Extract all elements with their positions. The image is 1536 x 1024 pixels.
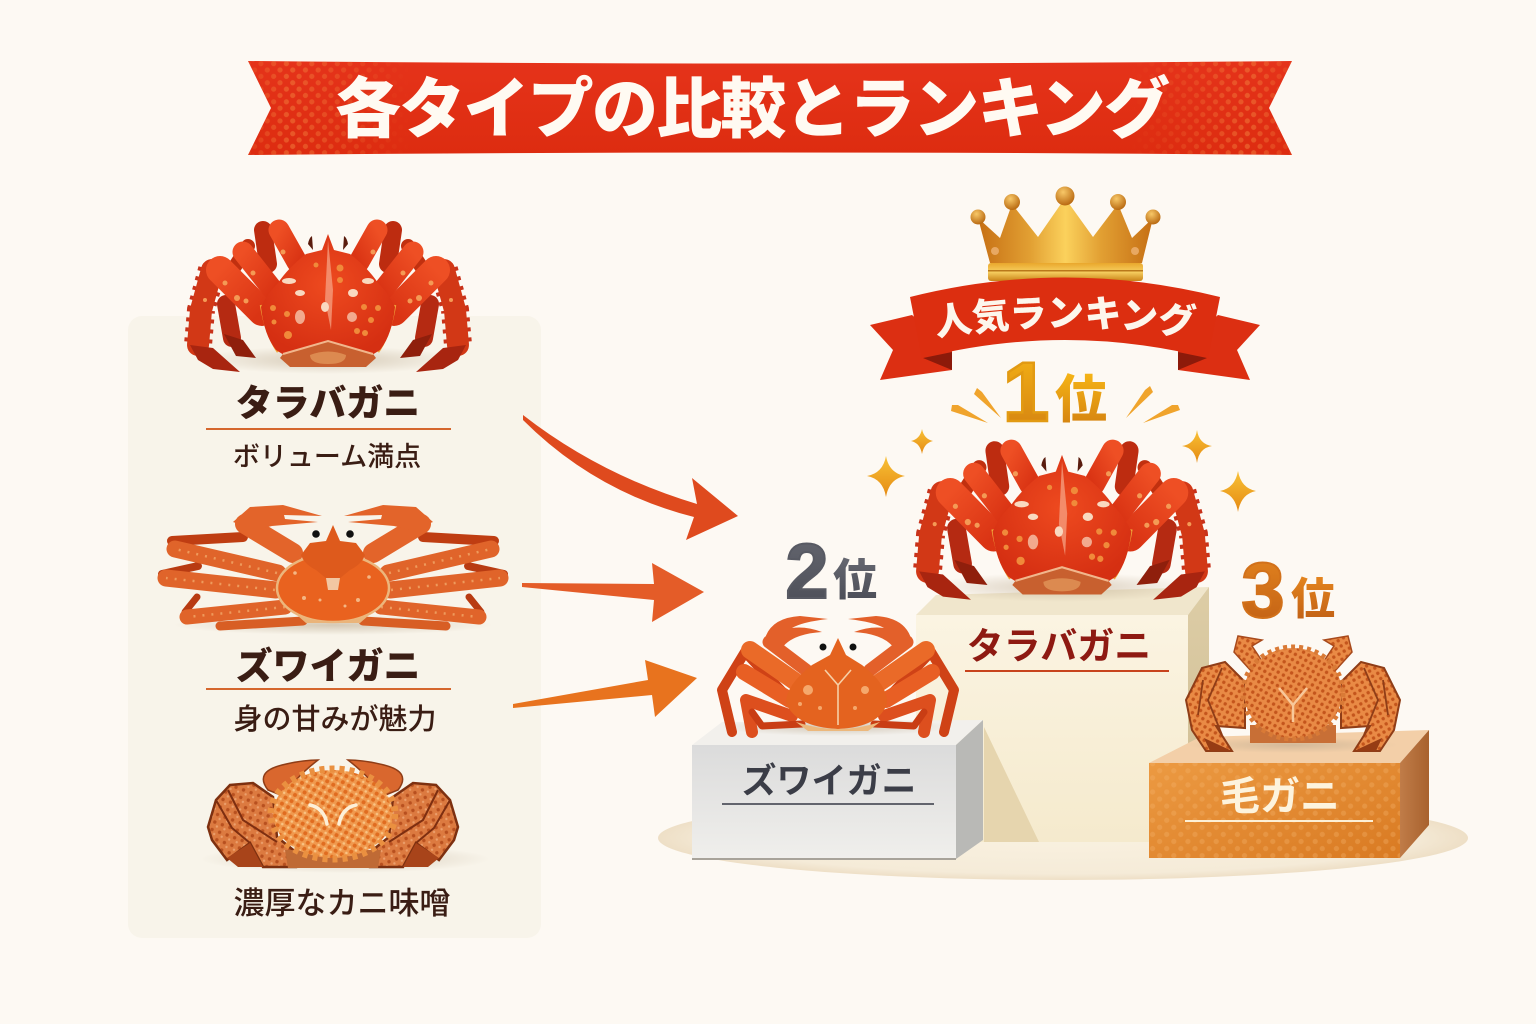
podium label: タラバガニ: タラバガニ	[967, 626, 1151, 667]
rank label: 3位: 3	[1241, 546, 1285, 634]
arrow: タラバガニ to ranking	[523, 415, 738, 540]
caption: 濃厚なカニ味噌: 濃厚なカニ味噌	[234, 886, 450, 921]
crab: タラバガニ illustration	[190, 230, 466, 374]
podium divider	[722, 803, 934, 805]
rank label: 2位: 2	[785, 527, 829, 615]
arrow: 毛ガニ to ranking	[513, 660, 697, 717]
podium floor shadow	[658, 796, 1468, 880]
heading: ズワイガニ: ズワイガニ	[236, 645, 420, 687]
rank label: 1位: 位	[1055, 372, 1107, 430]
arrow: ズワイガニ to ranking	[522, 563, 704, 622]
crown	[970, 186, 1160, 281]
heading: タラバガニ: タラバガニ	[236, 383, 420, 424]
podium label: 毛ガニ: 毛ガニ	[1220, 775, 1340, 819]
podium: 1st place	[916, 587, 1209, 842]
ribbon text: 人気ランキング	[937, 296, 1197, 338]
podium label: ズワイガニ: ズワイガニ	[741, 761, 917, 801]
podium divider	[1185, 820, 1373, 822]
divider: タラバガニ	[206, 428, 451, 430]
rank label: 1位	[1003, 345, 1107, 439]
divider: ズワイガニ	[206, 688, 451, 690]
crab: 毛ガニ illustration	[200, 760, 490, 873]
crab on podium: ズワイガニ	[721, 616, 954, 736]
crab on podium: 毛ガニ	[1186, 636, 1400, 753]
podium: 3rd place	[1149, 730, 1429, 858]
panel: crab types	[128, 230, 541, 938]
rank label: 2位	[785, 527, 877, 615]
rank label: 3位: 位	[1291, 575, 1335, 624]
podium divider	[965, 670, 1169, 672]
ranking ribbon	[870, 278, 1260, 380]
rank label: 2位: 位	[833, 556, 877, 605]
crab on podium: タラバガニ	[919, 451, 1205, 602]
crab: ズワイガニ illustration	[162, 505, 504, 635]
title text: 各タイプの比較とランキング	[335, 72, 1170, 146]
rank label: 1位: 1	[1003, 345, 1049, 439]
podium: 2nd place	[692, 720, 983, 860]
caption: 身の甘みが魅力: 身の甘みが魅力	[233, 703, 437, 736]
rays around 1位	[951, 386, 1180, 423]
title banner	[248, 61, 1292, 155]
caption: ボリューム満点: ボリューム満点	[233, 442, 421, 472]
rank label: 3位	[1241, 546, 1335, 634]
sparkles	[867, 429, 1256, 512]
